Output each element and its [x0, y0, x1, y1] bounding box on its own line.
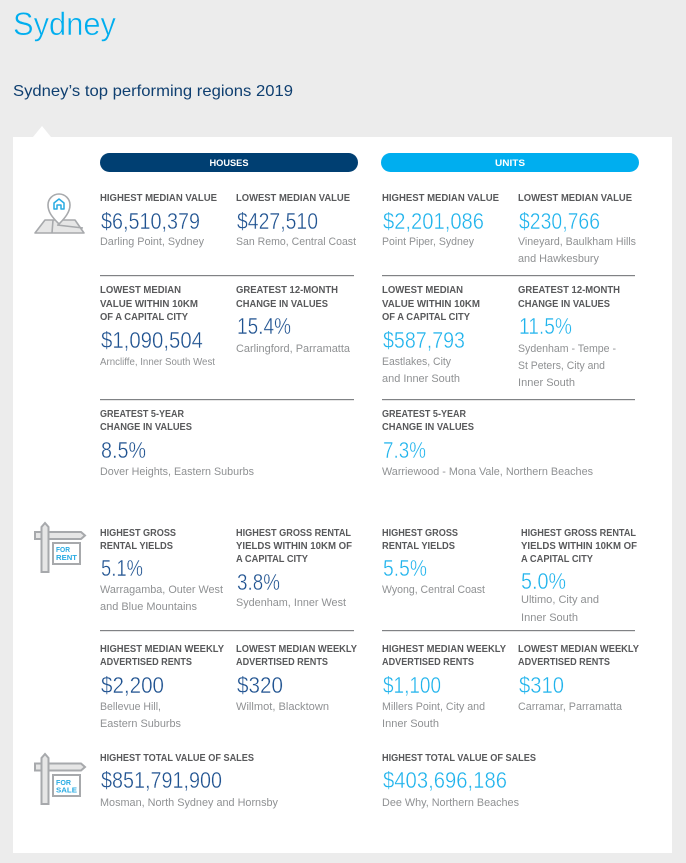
stat: highest weekly rents, houses: HIGHEST MEDIAN WEEKLY — [100, 644, 225, 655]
stat: 12-month change, houses: CHANGE IN VALUES — [236, 299, 329, 310]
panel: unit values — [382, 193, 636, 478]
stat: highest median value, houses: Darling Point, Sydney — [100, 236, 204, 248]
stat: total value of sales, units — [382, 753, 537, 809]
stat: total value of sales, houses — [100, 753, 278, 809]
stat: highest gross yields, units: 5.5% — [383, 555, 427, 581]
stat: lowest within 10km, units — [382, 285, 480, 385]
stat: highest median value, units — [382, 193, 500, 248]
stat: lowest median value, units — [518, 193, 636, 265]
stat: highest weekly rents, units: Inner South — [382, 718, 439, 730]
stat: gross yields within 10km, houses — [236, 528, 352, 609]
stat: lowest median value, units: and Hawkesbury — [518, 253, 599, 265]
stat: lowest within 10km, units: $587,793 — [383, 327, 465, 353]
stat: total value of sales, units: HIGHEST TOTAL VALUE OF SALES — [382, 753, 537, 764]
stat: lowest weekly rents, houses: $320 — [237, 672, 283, 698]
stat: lowest within 10km, houses: OF A CAPITAL CITY — [100, 312, 189, 323]
stat: highest median value, units: $2,201,086 — [383, 208, 484, 234]
stat: gross yields within 10km, units — [521, 528, 637, 624]
stat: gross yields within 10km, units: HIGHEST GROSS RENTAL — [521, 528, 636, 539]
stat: highest gross yields, houses: Warragamba, Outer West — [100, 584, 223, 596]
stat: gross yields within 10km, houses: 3.8% — [237, 569, 280, 595]
stat: lowest within 10km, units: VALUE WITHIN 10KM — [382, 299, 480, 310]
stat: lowest median value, houses — [236, 193, 356, 248]
stat: lowest weekly rents, houses: ADVERTISED RENTS — [236, 657, 329, 668]
stat: lowest within 10km, houses: Arncliffe, Inner South West — [100, 357, 215, 368]
stat: total value of sales, units: $403,696,186 — [383, 767, 507, 793]
stat: gross yields within 10km, houses: A CAPITAL CITY — [236, 554, 309, 565]
stat: lowest weekly rents, houses: LOWEST MEDIAN WEEKLY — [236, 644, 358, 655]
heading: units: UNITS — [495, 158, 525, 169]
stat: total value of sales, houses: Mosman, North Sydney and Hornsby — [100, 797, 278, 809]
stat: 5-year change, units: GREATEST 5-YEAR — [382, 409, 466, 420]
stat: lowest within 10km, units: Eastlakes, City — [382, 356, 451, 368]
stat: 12-month change, units — [518, 285, 620, 389]
stat: highest weekly rents, units: ADVERTISED RENTS — [382, 657, 475, 668]
stat: highest weekly rents, houses: $2,200 — [101, 672, 164, 698]
stat: lowest within 10km, houses: VALUE WITHIN 10KM — [100, 299, 198, 310]
stat: highest median value, units: Point Piper, Sydney — [382, 236, 474, 248]
stat: 12-month change, units: Inner South — [518, 377, 575, 389]
heading: houses — [100, 153, 358, 172]
stat: lowest weekly rents, units — [518, 644, 640, 713]
heading: units — [381, 153, 639, 172]
icon: for rent sign: RENT — [56, 553, 77, 562]
stat: lowest median value, houses: LOWEST MEDIAN VALUE — [236, 193, 351, 204]
stat: gross yields within 10km, houses: HIGHEST GROSS RENTAL — [236, 528, 351, 539]
icon: for sale sign: SALE — [56, 786, 77, 794]
stat: 5-year change, units: Warriewood - Mona Vale, Northern Beaches — [382, 466, 593, 478]
stat: lowest within 10km, units: OF A CAPITAL CITY — [382, 312, 471, 323]
stat: gross yields within 10km, units: Inner South — [521, 612, 578, 624]
stat: lowest median value, houses: $427,510 — [237, 208, 318, 234]
stat: 12-month change, units: 11.5% — [519, 313, 572, 339]
stat: lowest median value, houses: San Remo, Central Coast — [236, 236, 356, 248]
stat: highest gross yields, houses — [100, 528, 223, 613]
stat: highest gross yields, houses: 5.1% — [101, 555, 143, 581]
stat: highest gross yields, houses: RENTAL YIELDS — [100, 541, 174, 552]
icon: for sale sign — [35, 754, 85, 804]
stat: highest gross yields, units: HIGHEST GROSS — [382, 528, 458, 539]
stat: 12-month change, houses — [236, 285, 351, 355]
stat: lowest weekly rents, units: Carramar, Parramatta — [518, 701, 623, 713]
stat: lowest median value, units: LOWEST MEDIAN VALUE — [518, 193, 633, 204]
stat: highest gross yields, units: Wyong, Central Coast — [382, 584, 485, 596]
stat: gross yields within 10km, houses: Sydenham, Inner West — [236, 597, 346, 609]
stat: lowest weekly rents, units: ADVERTISED RENTS — [518, 657, 611, 668]
stat: 12-month change, houses: 15.4% — [237, 313, 291, 339]
stat: 5-year change, houses: CHANGE IN VALUES — [100, 422, 193, 433]
stat: lowest within 10km, houses: $1,090,504 — [101, 327, 203, 353]
stat: highest weekly rents, houses: ADVERTISED RENTS — [100, 657, 193, 668]
stat: 12-month change, houses: Carlingford, Parramatta — [236, 343, 351, 355]
icon: for sale sign: FOR — [56, 778, 72, 787]
stat: total value of sales, houses: HIGHEST TOTAL VALUE OF SALES — [100, 753, 255, 764]
stat: 12-month change, units: Sydenham - Tempe - — [518, 343, 616, 355]
stat: total value of sales, houses: $851,791,900 — [101, 767, 222, 793]
stat: 12-month change, units: GREATEST 12-MONTH — [518, 285, 620, 296]
stat: highest weekly rents, units — [382, 644, 507, 730]
stat: gross yields within 10km, units: 5.0% — [521, 568, 566, 594]
stat: 12-month change, units: CHANGE IN VALUES — [518, 299, 611, 310]
panel: house rents — [100, 528, 358, 730]
stat: highest median value, units: HIGHEST MEDIAN VALUE — [382, 193, 500, 204]
stat: 5-year change, houses: 8.5% — [101, 437, 146, 463]
stat: lowest median value, units: Vineyard, Baulkham Hills — [518, 236, 636, 248]
stat: highest median value, houses: HIGHEST MEDIAN VALUE — [100, 193, 218, 204]
stat: gross yields within 10km, units: YIELDS WITHIN 10KM OF — [521, 541, 637, 552]
stat: highest weekly rents, houses: Bellevue Hill, — [100, 701, 161, 713]
stat: gross yields within 10km, units: A CAPITAL CITY — [521, 554, 594, 565]
panel: unit rents — [382, 528, 640, 730]
icon: map pin — [35, 194, 84, 233]
stat: lowest within 10km, houses: LOWEST MEDIAN — [100, 285, 181, 296]
stat: lowest within 10km, houses — [100, 285, 215, 368]
stat: highest gross yields, units: RENTAL YIELDS — [382, 541, 456, 552]
stat: 5-year change, houses — [100, 409, 254, 478]
stat: highest weekly rents, units: HIGHEST MEDIAN WEEKLY — [382, 644, 507, 655]
title: Sydney — [13, 6, 116, 42]
subtitle: Sydney’s top performing regions 2019 — [13, 83, 293, 100]
stat: lowest weekly rents, houses: Willmot, Blacktown — [236, 701, 329, 713]
stat: 5-year change, units — [382, 409, 593, 478]
stat: gross yields within 10km, houses: YIELDS WITHIN 10KM OF — [236, 541, 352, 552]
stat: highest weekly rents, houses — [100, 644, 225, 730]
stat: 5-year change, units: 7.3% — [383, 437, 426, 463]
stat: lowest within 10km, units: LOWEST MEDIAN — [382, 285, 463, 296]
stat: lowest weekly rents, units: LOWEST MEDIAN WEEKLY — [518, 644, 640, 655]
panel: house values — [100, 193, 356, 478]
stat: gross yields within 10km, units: Ultimo, City and — [521, 594, 599, 606]
stat: highest gross yields, units — [382, 528, 485, 596]
stat: highest gross yields, houses: and Blue Mountains — [100, 601, 197, 613]
stat: highest weekly rents, units: $1,100 — [383, 672, 441, 698]
stat: 5-year change, houses: GREATEST 5-YEAR — [100, 409, 184, 420]
stat: 12-month change, units: St Peters, City and — [518, 360, 605, 372]
stat: lowest weekly rents, units: $310 — [519, 672, 564, 698]
stat: lowest weekly rents, houses — [236, 644, 358, 713]
stat: highest median value, houses — [100, 193, 218, 248]
stat: total value of sales, units: Dee Why, Northern Beaches — [382, 797, 519, 809]
stat: 5-year change, houses: Dover Heights, Eastern Suburbs — [100, 466, 254, 478]
icon: for rent sign — [35, 523, 85, 572]
stat: lowest median value, units: $230,766 — [519, 208, 600, 234]
stat: highest median value, houses: $6,510,379 — [101, 208, 200, 234]
stat: 12-month change, houses: GREATEST 12-MONTH — [236, 285, 338, 296]
stat: lowest within 10km, units: and Inner South — [382, 373, 460, 385]
stat: highest weekly rents, units: Millers Point, City and — [382, 701, 485, 713]
stat: highest gross yields, houses: HIGHEST GROSS — [100, 528, 176, 539]
icon: for rent sign: FOR — [56, 545, 71, 554]
stat: highest weekly rents, houses: Eastern Suburbs — [100, 718, 181, 730]
heading: houses: HOUSES — [210, 158, 248, 169]
stat: 5-year change, units: CHANGE IN VALUES — [382, 422, 475, 433]
